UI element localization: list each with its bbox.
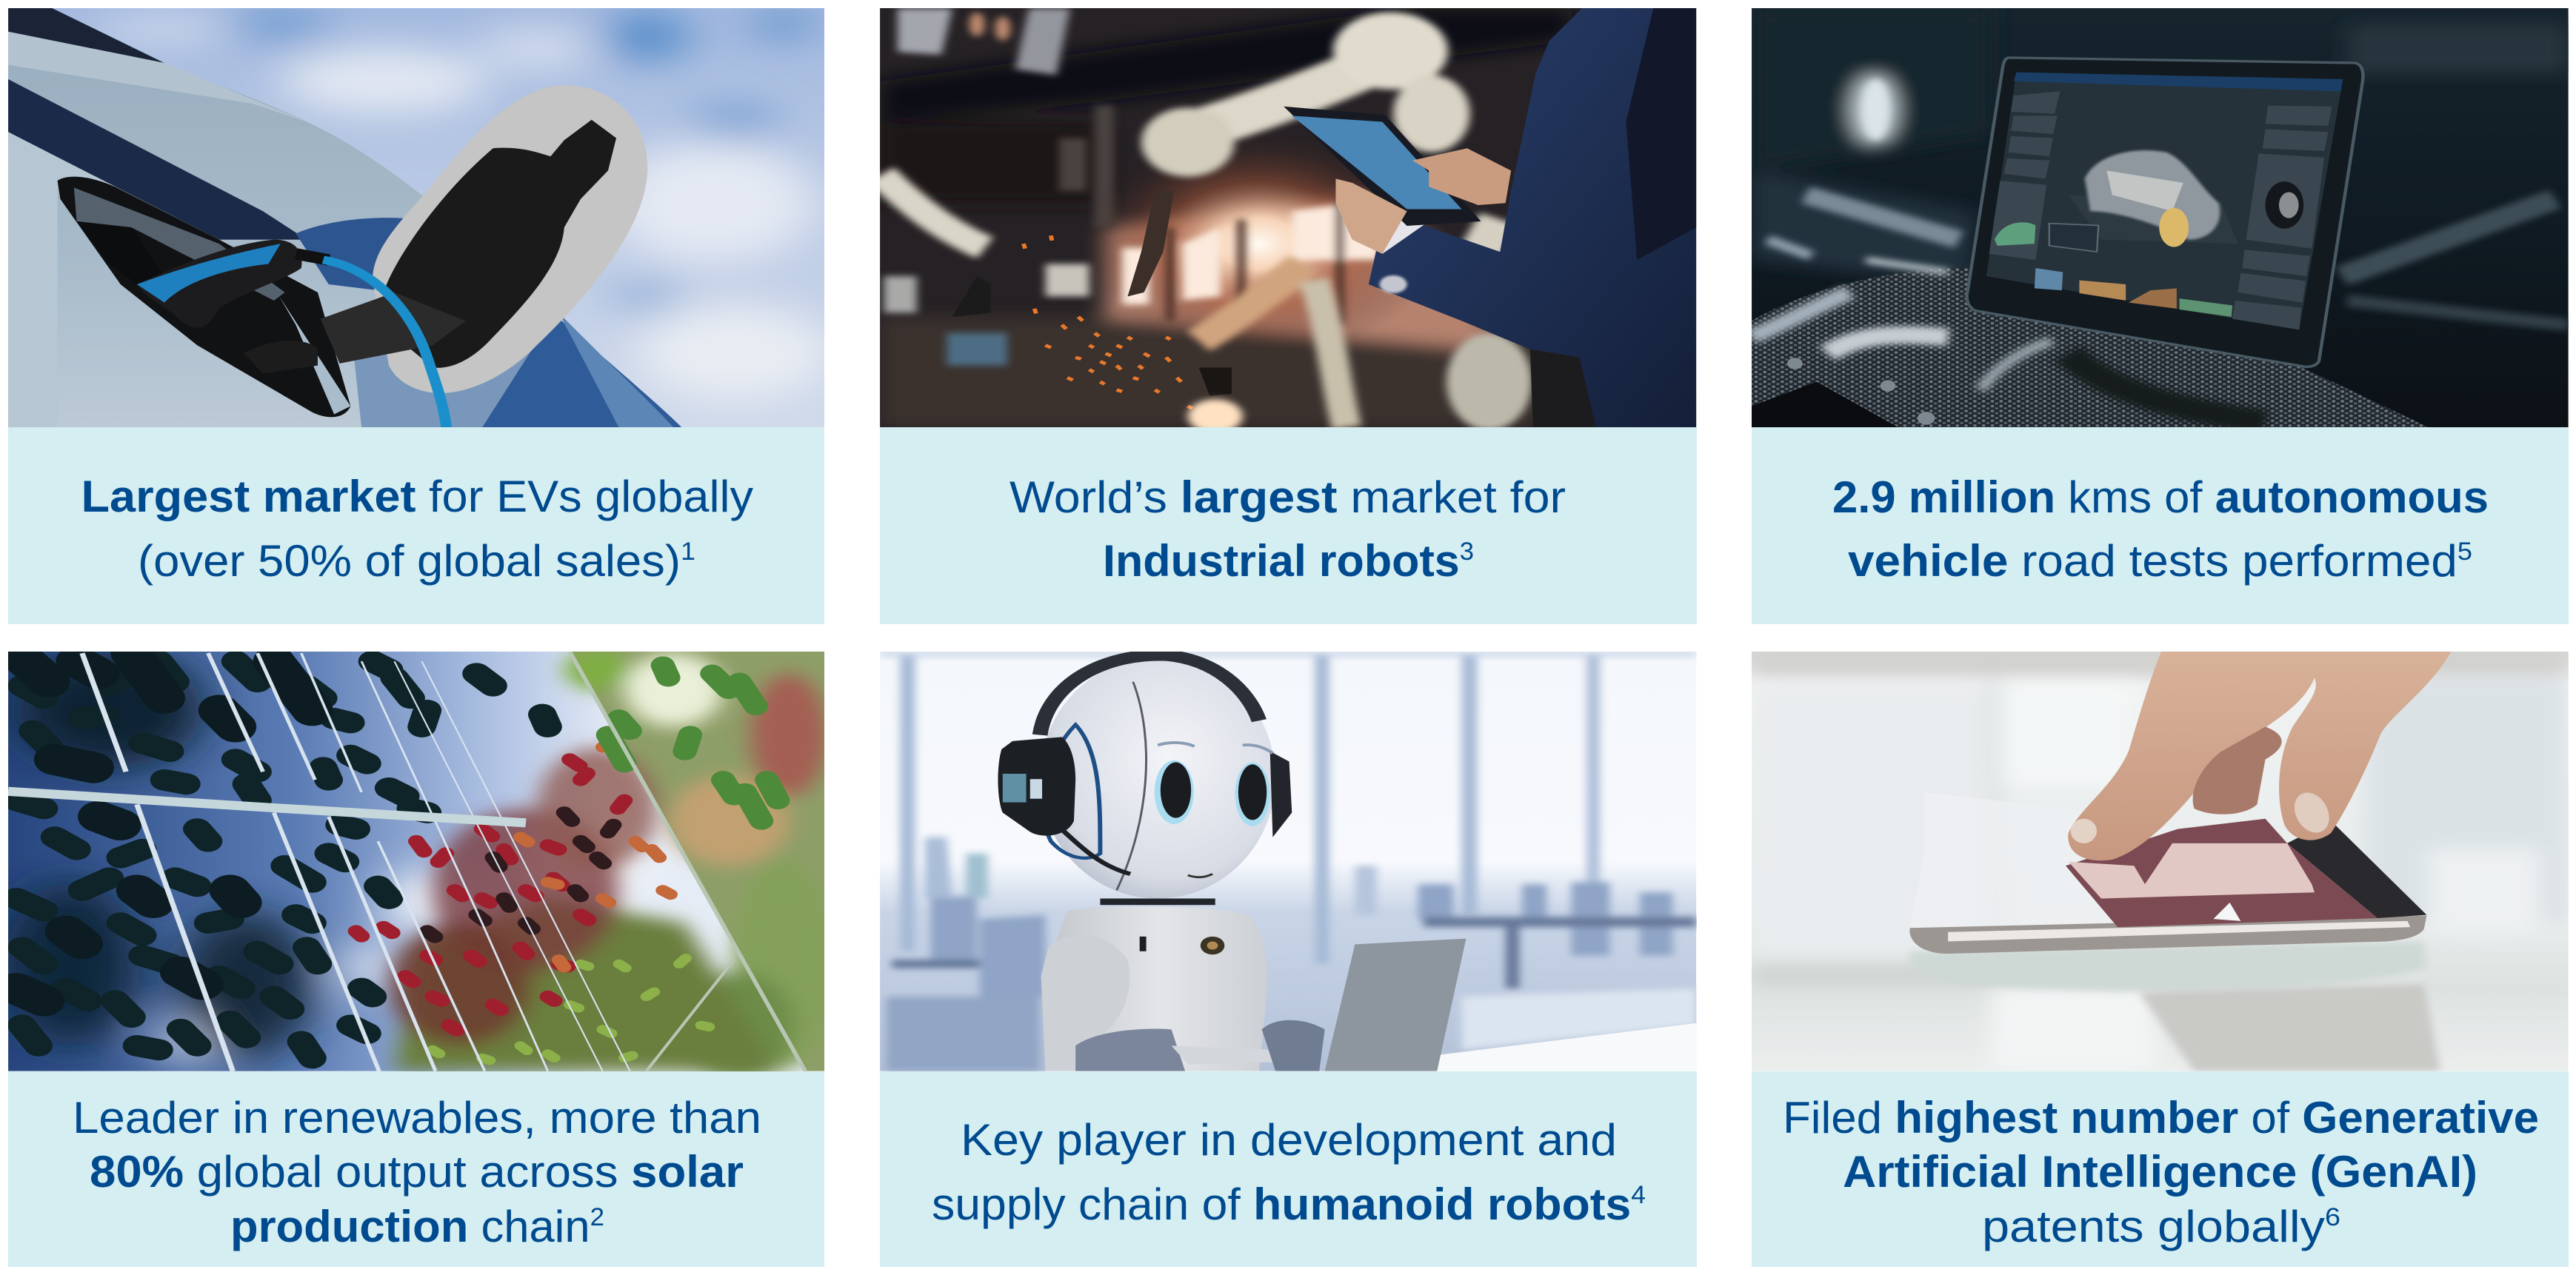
caption text [73,1093,761,1251]
tablet [1967,58,2363,367]
reflection on table [1909,941,2426,991]
caption text: 2.9 million kms of autonomous [1832,472,2489,522]
panel: renewables [5,649,832,1267]
caption band [1752,427,2569,624]
caption text: 1 [681,538,695,566]
caption band [880,1071,1697,1267]
caption band [1752,1071,2569,1267]
branch leaves top right [608,666,778,821]
caption text: 80% global output across solar [90,1147,744,1197]
caption band [880,427,1697,624]
hands and tablet [1284,107,1481,226]
hand [2068,652,2452,860]
photo: tablet on engine [1752,8,2569,428]
robot head [1040,658,1275,898]
reflected foliage [389,747,778,1071]
caption text: 3 [1460,538,1474,566]
car body [8,31,422,427]
caption band [8,427,824,624]
greenery right of panel [570,652,824,1071]
caption text: Industrial robots [1103,536,1460,586]
caption text: 6 [2325,1203,2340,1231]
caption text: World’s largest market for [1010,472,1566,522]
panel grid lines [8,652,805,1071]
caption text: Leader in renewables, more than [73,1093,761,1142]
suit [1369,8,1696,428]
panel: autonomous vehicles [1752,8,2569,624]
sparks [1024,235,1192,409]
robot arms [881,12,1532,430]
dark leaves [16,661,548,1058]
fuel flap [373,85,647,393]
caption text [1832,472,2489,586]
charging cable [323,260,447,428]
charging connector [137,240,301,328]
caption text [932,1115,1646,1229]
photo: factory robots [880,8,1696,433]
caption text: 5 [2457,538,2472,566]
caption text: Largest market for EVs globally [81,472,753,521]
photo: solar panel and leaves [5,649,832,1078]
laptop [1325,939,1466,1071]
carbon engine cover [1752,268,2429,428]
caption text [1010,472,1566,586]
caption text: Key player in development and [961,1115,1617,1165]
robot body [1056,906,1267,1071]
photo: EV charging [8,8,832,428]
caption text: 4 [1631,1181,1646,1209]
caption text: patents globally [1982,1202,2291,1251]
panel: industrial robots [880,8,1697,624]
photo: humanoid robot with laptop [880,652,1696,1071]
caption text [1783,1093,2539,1251]
charging port [58,177,350,417]
caption text: production chain [230,1202,587,1251]
photo: finger on tablet [1752,652,2569,1071]
panel: GenAI patents [1752,652,2569,1267]
caption text: (over 50% of global sales) [138,536,652,586]
car render [2069,195,2238,244]
robot eyes [1155,760,1194,824]
caption text: 2 [590,1203,604,1231]
caption text: Artificial Intelligence (GenAI) [1843,1147,2477,1197]
headphone [998,737,1075,836]
caption text [81,472,753,586]
caption band [8,1071,824,1267]
panel: EV market [8,8,832,624]
tablet [1909,792,2178,928]
caption text: vehicle road tests performed [1848,536,2431,586]
caption text: Filed highest number of Generative [1783,1093,2539,1142]
caption text: supply chain of humanoid robots [932,1180,1616,1229]
panel: humanoid robots [880,652,1697,1267]
